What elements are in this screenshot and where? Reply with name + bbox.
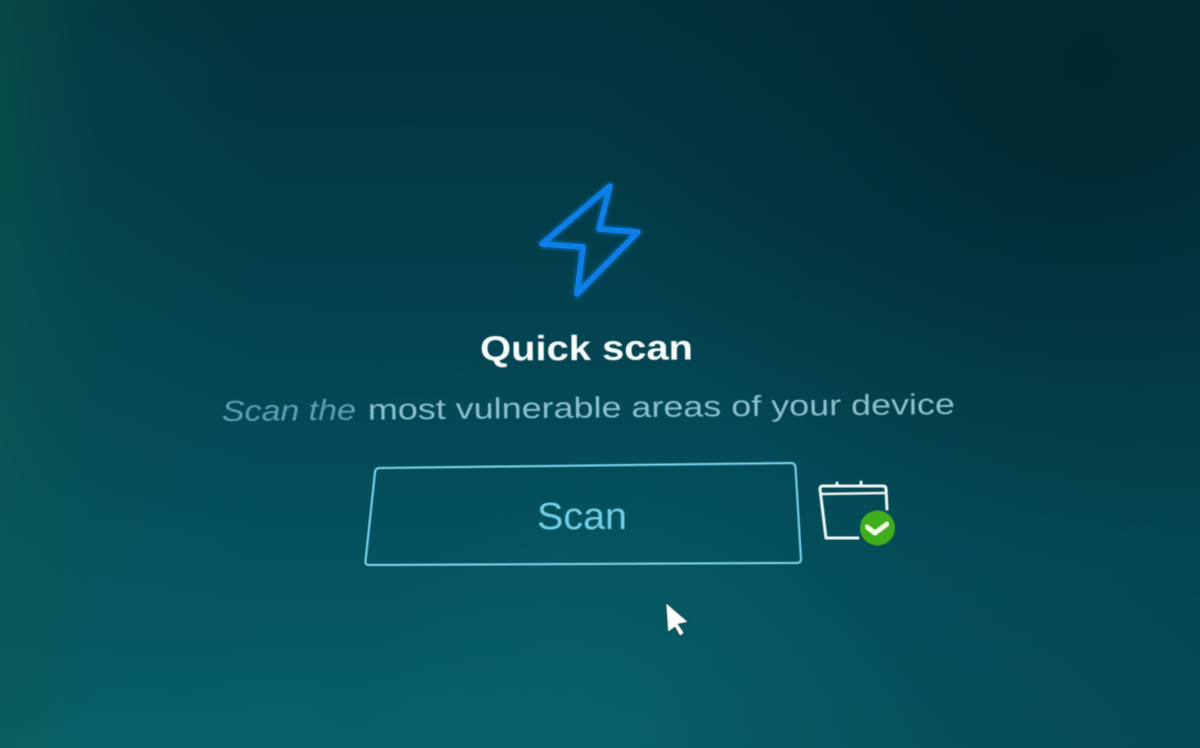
icon: mouse cursor [666,603,688,636]
subtitle text: most vulnerable areas of your device [368,389,955,427]
heading: Quick scan: Quick scan [480,328,693,369]
icon: calendar with green check [820,482,895,546]
button outline [365,463,801,565]
check mark [867,524,887,533]
scan button [365,463,801,565]
subtitle text [222,389,955,428]
icon: lightning bolt [542,186,638,294]
button label: Scan [537,496,627,538]
subtitle text: Scan the [222,395,356,428]
green check badge [860,510,895,546]
calendar outline [820,482,887,538]
